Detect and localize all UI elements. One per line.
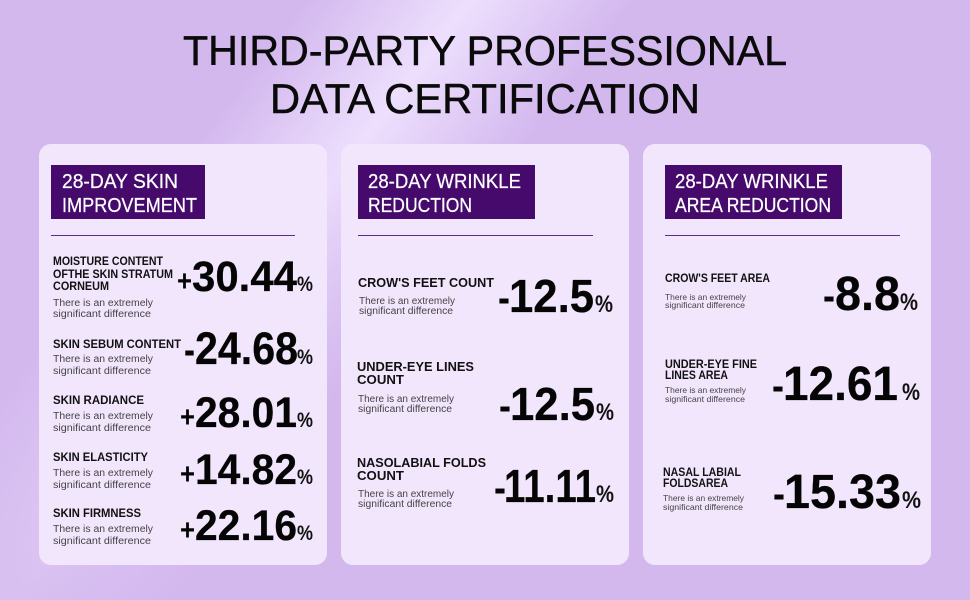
panel heading: 28-DAY WRINKLE bbox=[675, 171, 828, 193]
metric: skin radiance: 28.01 bbox=[195, 389, 297, 437]
metric: nasolabial folds count: There is an extremely bbox=[358, 489, 454, 500]
metric: skin radiance: There is an extremely bbox=[53, 411, 153, 422]
metric: nasal labial folds area: FOLDSAREA bbox=[663, 478, 728, 490]
metric: skin radiance: SKIN RADIANCE bbox=[53, 395, 144, 407]
metric: under-eye fine lines area bbox=[665, 358, 920, 411]
metric: moisture content: MOISTURE CONTENT bbox=[53, 256, 163, 268]
metric: under-eye lines count bbox=[357, 360, 614, 430]
metric: crow's feet count: significant difference bbox=[359, 306, 453, 317]
metric: skin firmness bbox=[53, 502, 313, 550]
panel: 28-day wrinkle reduction bbox=[341, 144, 629, 565]
metric: moisture content: + bbox=[177, 265, 192, 298]
metric: skin sebum content: SKIN SEBUM CONTENT bbox=[53, 339, 181, 351]
metric: moisture content: % bbox=[297, 273, 313, 296]
metric: under-eye lines count: 12.5 bbox=[510, 378, 595, 430]
metric: crow's feet count: % bbox=[595, 291, 613, 318]
metric: crow's feet count: 12.5 bbox=[509, 270, 594, 322]
metric: under-eye fine lines area: LINES AREA bbox=[665, 370, 728, 382]
metric: under-eye lines count: UNDER-EYE LINES bbox=[357, 360, 474, 374]
metric: under-eye lines count: COUNT bbox=[357, 373, 404, 387]
metric: nasal labial folds area bbox=[663, 466, 921, 519]
metric: under-eye fine lines area: % bbox=[902, 379, 920, 406]
metric: nasal labial folds area: % bbox=[902, 487, 921, 514]
metric: under-eye lines count: - bbox=[499, 382, 511, 429]
panel heading: 28-DAY WRINKLE bbox=[368, 171, 521, 193]
metric: skin sebum content: There is an extremely bbox=[53, 354, 153, 365]
metric: skin elasticity: There is an extremely bbox=[53, 468, 153, 479]
metric: skin firmness: There is an extremely bbox=[53, 524, 153, 535]
panel heading bbox=[51, 165, 205, 219]
metric: skin elasticity: + bbox=[180, 458, 195, 491]
metric: skin firmness: % bbox=[297, 522, 313, 545]
metric: moisture content: 30.44 bbox=[192, 253, 297, 301]
metric: moisture content: OFTHE SKIN STRATUM bbox=[53, 269, 173, 281]
panel heading: 28-DAY SKIN bbox=[62, 171, 178, 193]
metric: crow's feet area: 8.8 bbox=[835, 268, 900, 321]
metric: skin elasticity bbox=[53, 446, 313, 494]
metric: under-eye fine lines area: UNDER-EYE FINE bbox=[665, 359, 757, 371]
metric: nasolabial folds count: COUNT bbox=[357, 469, 404, 483]
metric: skin radiance: + bbox=[180, 401, 195, 434]
panel heading bbox=[665, 165, 842, 219]
metric: nasolabial folds count: 11.11 bbox=[504, 460, 596, 512]
metric: skin sebum content: - bbox=[184, 326, 195, 373]
metric: moisture content bbox=[53, 253, 313, 320]
metric: crow's feet count: - bbox=[498, 274, 510, 321]
metric: crow's feet area: There is an extremely bbox=[665, 292, 747, 302]
metric: crow's feet area: - bbox=[823, 272, 835, 319]
metric: skin elasticity: 14.82 bbox=[195, 446, 297, 494]
metric: skin sebum content: significant difference bbox=[53, 366, 151, 377]
metric: under-eye fine lines area: There is an extremely bbox=[665, 385, 747, 395]
title: THIRD-PARTY PROFESSIONAL bbox=[183, 27, 787, 74]
metric: nasal labial folds area: There is an extremely bbox=[663, 493, 745, 503]
metric: crow's feet count: CROW'S FEET COUNT bbox=[358, 276, 494, 290]
metric: skin firmness: + bbox=[180, 514, 195, 547]
metric: nasal labial folds area: significant difference bbox=[663, 502, 743, 512]
metric: under-eye fine lines area: 12.61 bbox=[783, 358, 898, 411]
metric: skin sebum content: 24.68 bbox=[195, 323, 298, 374]
panel: 28-day wrinkle area reduction bbox=[643, 144, 931, 565]
metric: skin firmness: 22.16 bbox=[195, 502, 297, 550]
panel heading: AREA REDUCTION bbox=[675, 195, 831, 217]
metric: moisture content: CORNEUM bbox=[53, 281, 109, 293]
metric: skin radiance bbox=[53, 389, 313, 437]
panel heading: IMPROVEMENT bbox=[62, 195, 197, 217]
metric: skin elasticity: % bbox=[297, 466, 313, 489]
title: DATA CERTIFICATION bbox=[270, 75, 700, 122]
metric: crow's feet area bbox=[665, 268, 918, 321]
metric: under-eye lines count: % bbox=[596, 399, 614, 426]
metric: crow's feet count bbox=[358, 270, 613, 322]
metric: crow's feet count: There is an extremely bbox=[359, 296, 455, 307]
metric: moisture content: There is an extremely bbox=[53, 298, 153, 309]
metric: nasolabial folds count: - bbox=[494, 464, 506, 511]
metric: under-eye fine lines area: significant difference bbox=[665, 394, 745, 404]
metric: under-eye lines count: significant difference bbox=[358, 404, 452, 415]
metric: skin elasticity: SKIN ELASTICITY bbox=[53, 452, 148, 464]
metric: nasolabial folds count: significant difference bbox=[358, 499, 452, 510]
metric: nasal labial folds area: NASAL LABIAL bbox=[663, 467, 741, 479]
panel heading bbox=[358, 165, 535, 219]
panel: 28-day skin improvement bbox=[39, 144, 327, 565]
metric: skin radiance: significant difference bbox=[53, 423, 151, 434]
metric: nasolabial folds count: NASOLABIAL FOLDS bbox=[357, 456, 486, 470]
panel heading: REDUCTION bbox=[368, 195, 472, 217]
metric: nasal labial folds area: - bbox=[773, 470, 785, 517]
metric: crow's feet area: CROW'S FEET AREA bbox=[665, 273, 770, 285]
metric: under-eye fine lines area: - bbox=[772, 362, 784, 409]
metric: skin sebum content bbox=[53, 323, 313, 377]
title bbox=[183, 27, 787, 122]
metric: skin firmness: SKIN FIRMNESS bbox=[53, 508, 141, 520]
metric: moisture content: significant difference bbox=[53, 309, 151, 320]
metric: nasal labial folds area: 15.33 bbox=[784, 466, 901, 519]
metric: crow's feet area: significant difference bbox=[665, 300, 745, 310]
metric: nasolabial folds count: % bbox=[596, 481, 614, 508]
metric: crow's feet area: % bbox=[900, 289, 918, 316]
metric: skin sebum content: % bbox=[297, 346, 313, 369]
metric: under-eye lines count: There is an extremely bbox=[358, 394, 454, 405]
metric: skin elasticity: significant difference bbox=[53, 480, 151, 491]
metric: nasolabial folds count bbox=[357, 456, 614, 512]
metric: skin firmness: significant difference bbox=[53, 536, 151, 547]
metric: skin radiance: % bbox=[297, 409, 313, 432]
